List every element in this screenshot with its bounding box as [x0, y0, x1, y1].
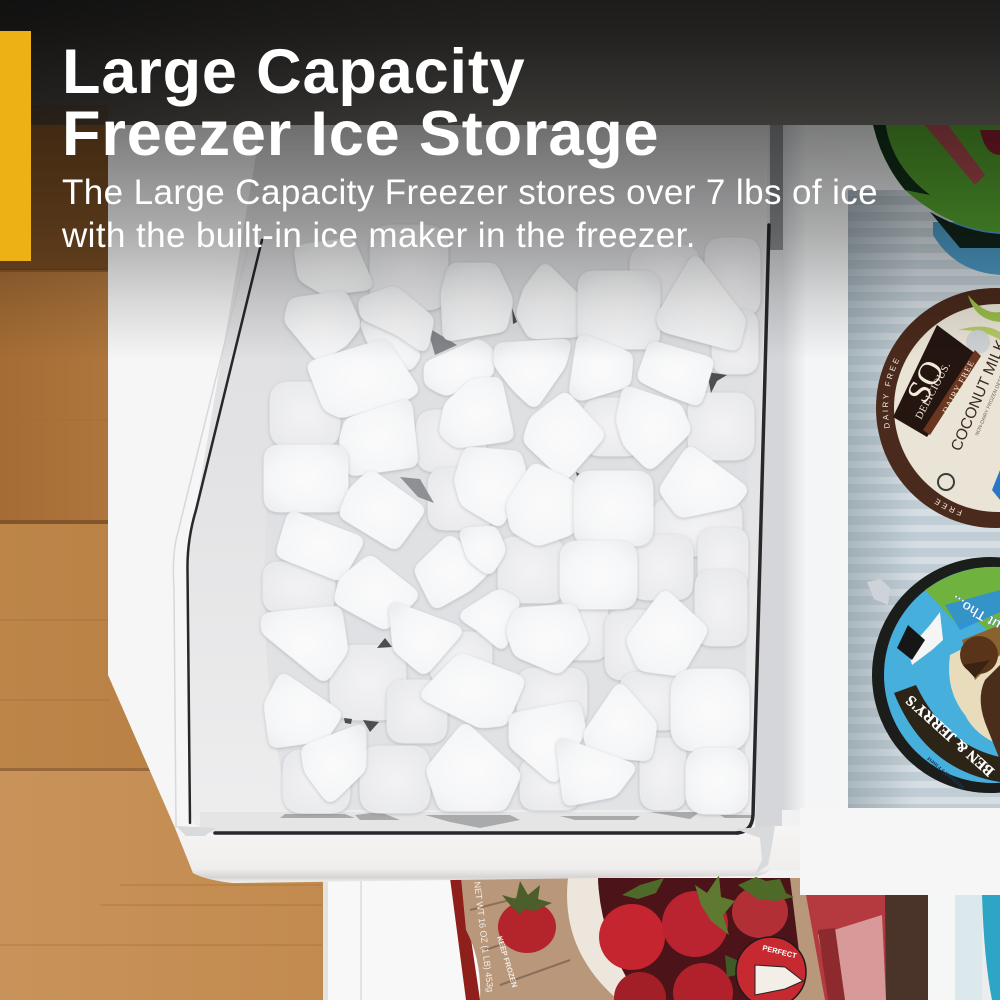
top dark area	[0, 0, 1000, 360]
wood floor	[0, 100, 340, 1000]
clear ice bin	[173, 120, 783, 833]
description text: with the built-in ice maker in the freezer.	[62, 216, 696, 255]
frozen strawberries bag: NET WT 16 OZ (1 LB) 453g	[472, 881, 495, 993]
ice cream tub: Ben and Jerry's: BEN & JERRY'S	[903, 692, 998, 779]
ice cream tub: So Delicious	[876, 288, 1000, 528]
ice cream tub: So Delicious: SO	[900, 355, 952, 409]
ice cream tub: Ben and Jerry's: Vermont's Finest	[925, 755, 966, 791]
ice cream tub: So Delicious: DAIRY FREE	[940, 358, 976, 415]
frozen strawberries bag: KEEP FROZEN	[495, 935, 519, 988]
ice cubes: back layer	[263, 225, 760, 813]
ice cream tub: Ben and Jerry's	[872, 557, 1000, 793]
description text: The Large Capacity Freezer stores over 7 lbs of ice	[62, 173, 878, 212]
right door panel front	[800, 808, 1000, 895]
ice cream tub: So Delicious: DELICIOUS.	[914, 361, 953, 421]
bin dark rim lines	[187, 225, 769, 833]
bin front lip	[176, 826, 800, 883]
ice cream tub: green lid	[872, 120, 1000, 275]
ice cream tub: So Delicious: DAIRY FREE	[882, 358, 900, 428]
accent bar	[0, 31, 31, 261]
title: Freezer Ice Storage	[62, 99, 659, 169]
title: Large Capacity	[62, 37, 526, 107]
lower drawer	[323, 878, 1000, 1000]
badge	[736, 937, 806, 1000]
freezer frame	[108, 120, 1000, 1000]
ice cream tub: So Delicious: FREE	[934, 498, 962, 516]
frozen strawberries bag	[450, 875, 886, 1000]
ice cubes: pile base	[265, 245, 750, 810]
title	[62, 37, 659, 169]
ice cubes: front layer	[266, 243, 744, 809]
description text	[62, 173, 878, 255]
gaps between cubes	[344, 308, 727, 732]
badge: PERFECT	[762, 943, 798, 961]
lower reflections in bin	[200, 812, 752, 832]
